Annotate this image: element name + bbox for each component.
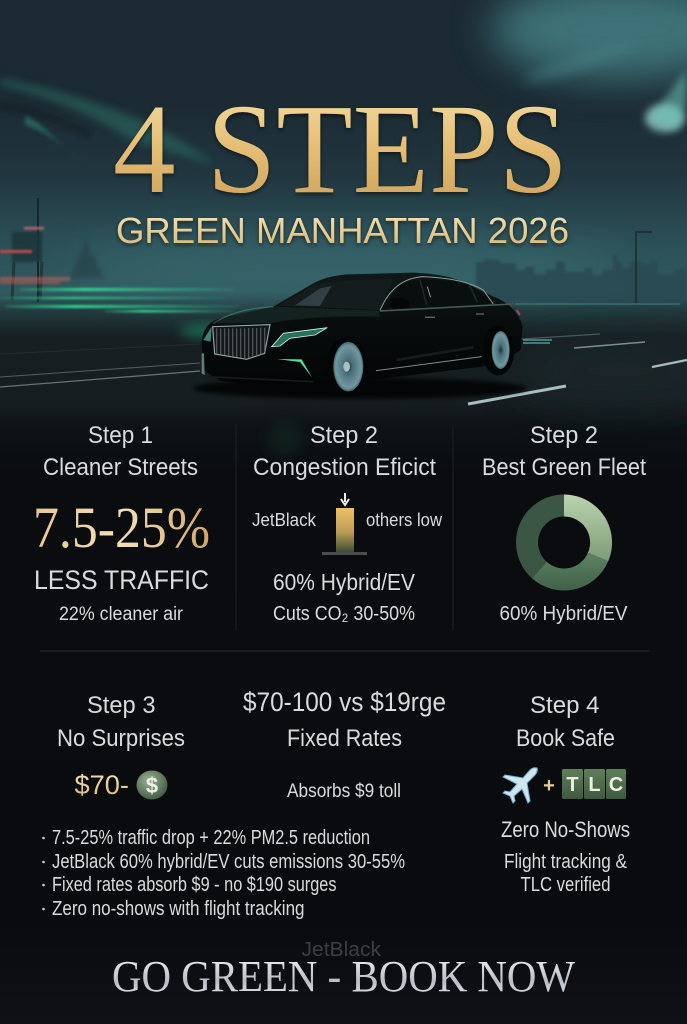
panel: congestion efficiency: Step 2 bbox=[310, 422, 378, 449]
panel: best green fleet: Best Green Fleet bbox=[482, 454, 646, 481]
panel: no surprises: Step 3 bbox=[87, 692, 156, 719]
plus sign: + bbox=[543, 775, 555, 797]
panel: no surprises bbox=[57, 692, 185, 800]
call to action: GO GREEN - BOOK NOW bbox=[112, 952, 575, 1001]
panel: congestion efficiency bbox=[252, 422, 443, 625]
stat: traffic reduction: 7.5-25% bbox=[33, 495, 210, 560]
brand label: JetBlack bbox=[302, 939, 382, 961]
panel: congestion efficiency: others low bbox=[366, 510, 443, 530]
icon: TLC badge: T bbox=[566, 774, 579, 796]
icon: dollar coin: $ bbox=[146, 773, 158, 798]
panel: no surprises: $70- bbox=[74, 770, 129, 800]
panel: fixed rates: Absorbs $9 toll bbox=[287, 781, 401, 802]
panel: book safe: Step 4 bbox=[530, 692, 600, 719]
icon: TLC badge: L bbox=[588, 774, 601, 796]
panel: congestion efficiency: JetBlack bbox=[252, 510, 317, 530]
panel: cleaner streets: 22% cleaner air bbox=[59, 604, 184, 625]
subheading: GREEN MANHATTAN 2026 bbox=[116, 210, 569, 251]
panel: book safe: TLC verified bbox=[520, 874, 610, 896]
panel: book safe: Book Safe bbox=[516, 725, 615, 752]
bullet list: 7.5-25% traffic drop + 22% PM2.5 reduction bbox=[52, 827, 370, 849]
panel: best green fleet: 60% Hybrid/EV bbox=[500, 603, 628, 625]
donut chart bbox=[516, 494, 612, 591]
icon: TLC badge: C bbox=[609, 774, 623, 796]
background: stormy sky and dark road bbox=[0, 0, 687, 458]
skyline and street lamps bbox=[0, 198, 687, 304]
mirror bbox=[390, 298, 410, 309]
bullet list: Zero no-shows with flight tracking bbox=[52, 898, 304, 920]
heading: 4 STEPS: 4 STEPS bbox=[113, 78, 568, 220]
panel: book safe bbox=[501, 692, 630, 896]
grille bbox=[213, 325, 270, 359]
panel: cleaner streets bbox=[33, 422, 210, 625]
bar chart bbox=[322, 508, 367, 555]
windows bbox=[278, 279, 393, 310]
bullet list bbox=[42, 827, 405, 920]
front wheel bbox=[326, 337, 367, 396]
bullet list: Fixed rates absorb $9 - no $190 surges bbox=[52, 874, 336, 896]
light trails bbox=[0, 277, 240, 337]
panel: congestion efficiency: 60% Hybrid/EV bbox=[273, 569, 416, 595]
icon: down arrow bbox=[341, 493, 349, 505]
title bbox=[113, 78, 569, 251]
panel: book safe: Zero No-Shows bbox=[501, 817, 630, 842]
panel: fixed rates bbox=[243, 687, 446, 802]
panel: best green fleet bbox=[482, 422, 646, 625]
bullet list: JetBlack 60% hybrid/EV cuts emissions 30-55% bbox=[52, 851, 405, 873]
divider: column rules bbox=[40, 425, 650, 651]
panel: congestion efficiency: Congestion Eficict bbox=[253, 454, 436, 481]
panel: best green fleet: Step 2 bbox=[530, 422, 598, 449]
panel: cleaner streets: Cleaner Streets bbox=[43, 454, 198, 481]
icon: airplane bbox=[503, 768, 537, 803]
car: black limousine with green lights bbox=[193, 273, 527, 399]
panel: fixed rates: $70-100 vs $19rge bbox=[243, 687, 446, 717]
panel: cleaner streets: LESS TRAFFIC bbox=[34, 565, 209, 595]
panel: book safe: Flight tracking & bbox=[504, 851, 628, 873]
panel: no surprises: No Surprises bbox=[57, 725, 185, 752]
headlights bbox=[272, 328, 327, 347]
panel: congestion efficiency: Cuts CO₂ 30-50% bbox=[273, 603, 415, 625]
road markings bbox=[0, 304, 687, 404]
panel: fixed rates: Fixed Rates bbox=[287, 725, 402, 752]
panel: cleaner streets: Step 1 bbox=[88, 422, 153, 449]
rear wheel bbox=[482, 326, 514, 375]
icon: TLC badge bbox=[562, 769, 626, 799]
